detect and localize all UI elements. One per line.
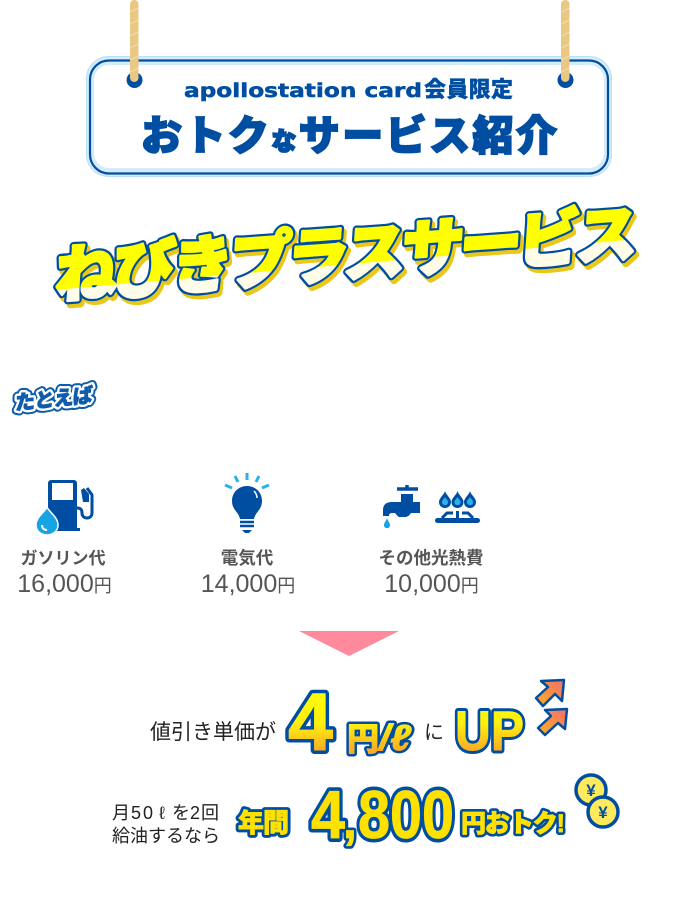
number: 4 yen per litre: 円 (347, 721, 379, 757)
text: price lead: 値引き単価が (150, 721, 276, 744)
icon: water tap (383, 485, 420, 528)
text: ni: に (424, 722, 444, 744)
number: 4 yen per litre: /ℓ (377, 717, 411, 758)
sign subtitle (184, 77, 513, 102)
number: 4,800 yen saving: 円おトク! (461, 810, 565, 838)
number: 4,800 yen saving: 800 (358, 777, 454, 853)
number: 4 yen per litre: 4 (288, 677, 333, 768)
column: other utilities (378, 485, 484, 598)
badge: example label: たとえば (15, 384, 93, 415)
text: UP: UP (455, 699, 524, 762)
main heading: ねびきプラスサービス (56, 203, 643, 316)
icon: left rope and hole (126, 0, 142, 88)
number: 4 yen per litre: /ℓ (377, 717, 411, 758)
number: 4,800 yen saving: , (343, 793, 357, 849)
sign subtitle: 会員限定 (424, 77, 513, 102)
text: saving condition: 月50ℓを2回 (112, 803, 219, 823)
main heading: ねびきプラスサービス (53, 199, 640, 312)
sign title: おトクなサービス紹介 (141, 113, 557, 159)
amount: electricity: 14,000円 (201, 570, 295, 598)
amount: gasoline: 16,000円 (17, 570, 112, 598)
number: 4,800 yen saving: 円おトク! (461, 810, 565, 838)
icon: light bulb (225, 473, 269, 533)
text: UP: UP (455, 699, 524, 762)
panel: hanging sign (86, 0, 612, 176)
number: 4,800 yen saving: 年間 (238, 808, 289, 838)
icon: yen coins: ¥ (586, 781, 596, 800)
callout: unit price up (150, 677, 567, 768)
number: 4,800 yen saving: 年間 (238, 808, 289, 838)
amount: other utilities: 10,000円 (384, 570, 479, 598)
badge: example label: たとえば (15, 384, 93, 415)
number: 4,800 yen saving: 800 (358, 777, 454, 853)
icon: up arrows (536, 680, 567, 735)
number: 4 yen per litre: 円 (347, 721, 379, 757)
label: electricity: 電気代 (221, 548, 274, 568)
main heading: ねびきプラスサービス (53, 199, 640, 312)
arrow: down triangle (299, 631, 399, 656)
column: electricity (201, 473, 295, 598)
badge: example label: たとえば (15, 384, 93, 415)
callout: annual saving: 給油するなら (112, 826, 220, 846)
number: 4,800 yen saving: 4 (311, 777, 345, 853)
icon: right rope and hole (558, 0, 574, 88)
sign subtitle: apollostation card (184, 81, 422, 102)
icon: gas burner (435, 491, 480, 523)
number: 4 yen per litre: 4 (288, 677, 333, 768)
number: 4 yen per litre (288, 677, 411, 768)
number: 4,800 yen saving (238, 777, 565, 853)
number: 4,800 yen saving: 4 (311, 777, 345, 853)
callout: annual saving (112, 775, 618, 853)
icon: fuel pump (36, 480, 92, 535)
column: gasoline (17, 480, 112, 598)
number: 4,800 yen saving: , (343, 793, 357, 849)
sign board (86, 56, 612, 176)
icon: yen coins (576, 775, 618, 828)
label: other utilities: その他光熱費 (378, 548, 484, 568)
icon: yen coins: ¥ (598, 803, 608, 822)
label: gasoline: ガソリン代 (20, 549, 106, 568)
